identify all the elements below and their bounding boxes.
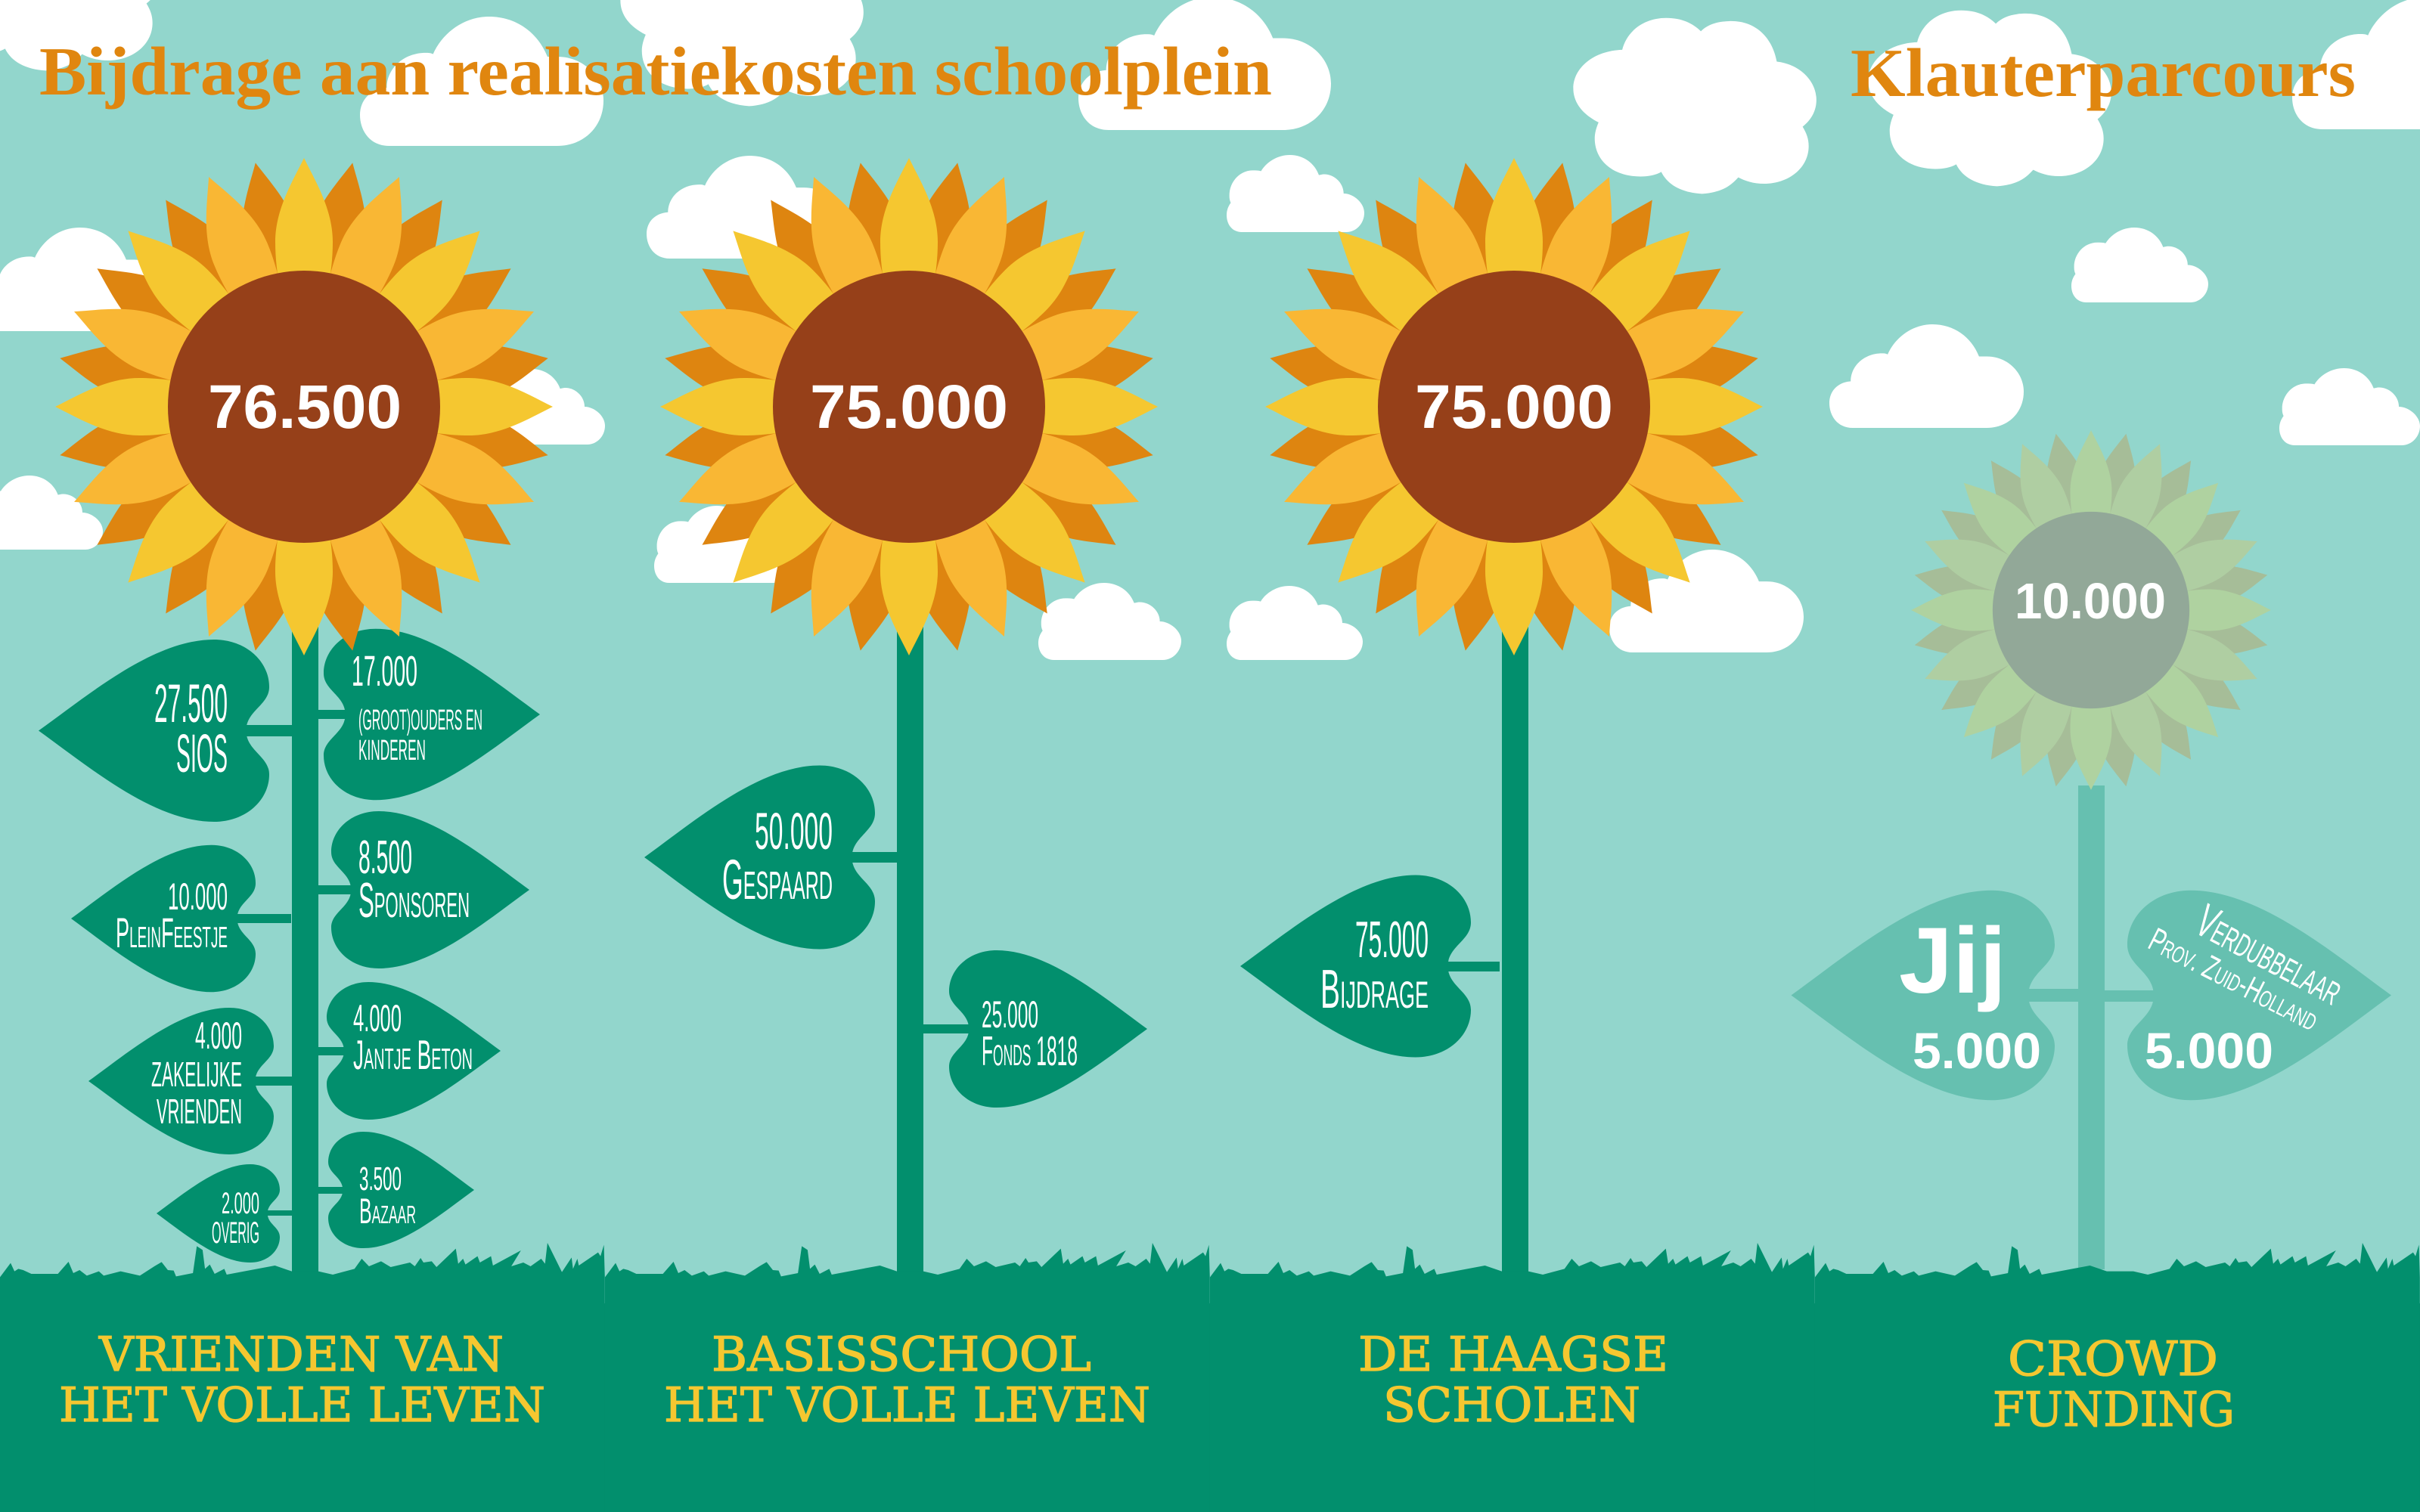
leaf: 50.000 Gespaard xyxy=(644,765,897,950)
leaf: 75.000 Bijdrage xyxy=(1240,875,1500,1057)
plant: Basisschool Het Volle Leven xyxy=(616,114,1202,1281)
leaf: 27.500 SIOS: SIOS xyxy=(176,724,228,784)
leaf: 25.000 Fonds 1818 xyxy=(923,950,1147,1108)
leaf: 17.000 (groot)ouders en kinderen: KINDEREN xyxy=(358,735,426,767)
leaf: 3.500 Bazaar xyxy=(318,1132,474,1248)
label: De Haagse Scholen xyxy=(1358,1327,1668,1433)
label: Basisschool Het Volle Leven xyxy=(664,1327,1150,1433)
plant: Vrienden van het Volle Leven xyxy=(11,114,597,1281)
leaf: 27.500 SIOS xyxy=(39,640,292,822)
title: Bijdrage aan realisatiekosten schoolplein: Bijdrage aan realisatiekosten schoolplein xyxy=(39,33,1272,110)
label: De Haagse Scholen: DE HAAGSE xyxy=(1358,1327,1668,1382)
leaf: Jij 5.000 xyxy=(1791,891,2078,1100)
sunflower 75.000: 75.000 xyxy=(810,373,1008,442)
label: Vrienden van het Volle Leven xyxy=(59,1327,545,1433)
leaf: 50.000 Gespaard: 50.000 xyxy=(755,802,833,860)
leaf: 10.000 PleinFeestje: 10.000 xyxy=(168,875,228,918)
label: Vrienden van het Volle Leven: HET VOLLE LEVEN xyxy=(59,1377,545,1433)
stem xyxy=(292,605,318,1281)
leaf: Verdubbelaar Prov. Zuid-Holland 5.000: 5.000 xyxy=(2145,1023,2273,1080)
sunflower 10.000: 10.000 xyxy=(2015,573,2166,630)
leaf: 27.500 SIOS: 27.500 xyxy=(154,674,228,734)
leaf: 4.000 Jantje Beton: Jantje Beton xyxy=(353,1031,473,1078)
grass strip xyxy=(0,1243,2420,1512)
leaf: 3.500 Bazaar: 3.500 xyxy=(359,1160,402,1198)
leaf: 75.000 Bijdrage: Bijdrage xyxy=(1320,959,1429,1020)
title: Klauterparcours: Klauterparcours xyxy=(1851,35,2356,111)
leaf: 10.000 PleinFeestje xyxy=(71,845,291,992)
leaf: 4.000 zakelijke vrienden: ZAKELIJKE xyxy=(151,1055,242,1094)
label: Crowd Funding: CROWD xyxy=(2008,1331,2218,1387)
leaf: 17.000 (groot)ouders en kinderen xyxy=(318,629,540,800)
plant: Crowd Funding (pale) xyxy=(1791,398,2391,1269)
leaf: 2.000 overig xyxy=(157,1164,292,1263)
plant: De Haagse Scholen xyxy=(1221,114,1807,1281)
sunflower 75.000 xyxy=(616,114,1202,699)
leaf: 17.000 (groot)ouders en kinderen: 17.000 xyxy=(352,647,417,696)
leaf: 4.000 zakelijke vrienden: 4.000 xyxy=(195,1015,242,1057)
stem xyxy=(1502,605,1528,1281)
leaf: Verdubbelaar Prov. Zuid-Holland 5.000: Prov. Zuid-Holland xyxy=(2142,921,2325,1038)
leaf: 4.000 zakelijke vrienden: VRIENDEN xyxy=(157,1092,242,1131)
leaf: 75.000 Bijdrage: 75.000 xyxy=(1355,911,1429,968)
leaf: 4.000 Jantje Beton xyxy=(318,982,501,1120)
leaf: 8.500 Sponsoren: Sponsoren xyxy=(358,872,470,928)
leaf: 4.000 zakelijke vrienden xyxy=(88,1008,292,1154)
clouds xyxy=(0,0,2420,660)
leaf: 50.000 Gespaard: Gespaard xyxy=(722,848,833,911)
leaf: 2.000 overig: 2.000 xyxy=(222,1187,259,1220)
label: Basisschool Het Volle Leven: BASISSCHOOL xyxy=(712,1327,1091,1382)
leaf: Verdubbelaar Prov. Zuid-Holland 5.000 xyxy=(2105,891,2391,1100)
sunflower 75.000: 75.000 xyxy=(1415,373,1613,442)
stem xyxy=(2078,785,2105,1269)
label: Crowd Funding: FUNDING xyxy=(1993,1382,2235,1437)
label: Crowd Funding xyxy=(1993,1331,2235,1437)
sunflower 76.500: 76.500 xyxy=(208,373,402,442)
leaf: 8.500 Sponsoren: 8.500 xyxy=(358,832,412,884)
leaf: 3.500 Bazaar: Bazaar xyxy=(359,1191,416,1231)
stem xyxy=(897,605,923,1281)
leaf: 4.000 Jantje Beton: 4.000 xyxy=(353,997,402,1040)
label: De Haagse Scholen: SCHOLEN xyxy=(1383,1377,1640,1433)
sunflower 75.000 xyxy=(1221,114,1807,699)
leaf: 25.000 Fonds 1818: 25.000 xyxy=(982,993,1038,1036)
sunflower 76.500 xyxy=(11,114,597,699)
leaf: 8.500 Sponsoren xyxy=(318,811,529,968)
sunflower 10.000 xyxy=(1879,398,2303,822)
leaf: 10.000 PleinFeestje: PleinFeestje xyxy=(116,909,228,956)
leaf: 2.000 overig: OVERIG xyxy=(212,1216,259,1250)
leaf: 17.000 (groot)ouders en kinderen: (GROOT)OUDERS EN xyxy=(358,705,482,736)
leaf: 25.000 Fonds 1818: Fonds 1818 xyxy=(982,1027,1078,1074)
label: Basisschool Het Volle Leven: HET VOLLE LEVEN xyxy=(664,1377,1150,1433)
leaf: Jij 5.000: Jij xyxy=(1899,909,2006,1013)
leaf: Jij 5.000: 5.000 xyxy=(1913,1023,2041,1080)
label: Vrienden van het Volle Leven: VRIENDEN VAN xyxy=(98,1327,504,1382)
